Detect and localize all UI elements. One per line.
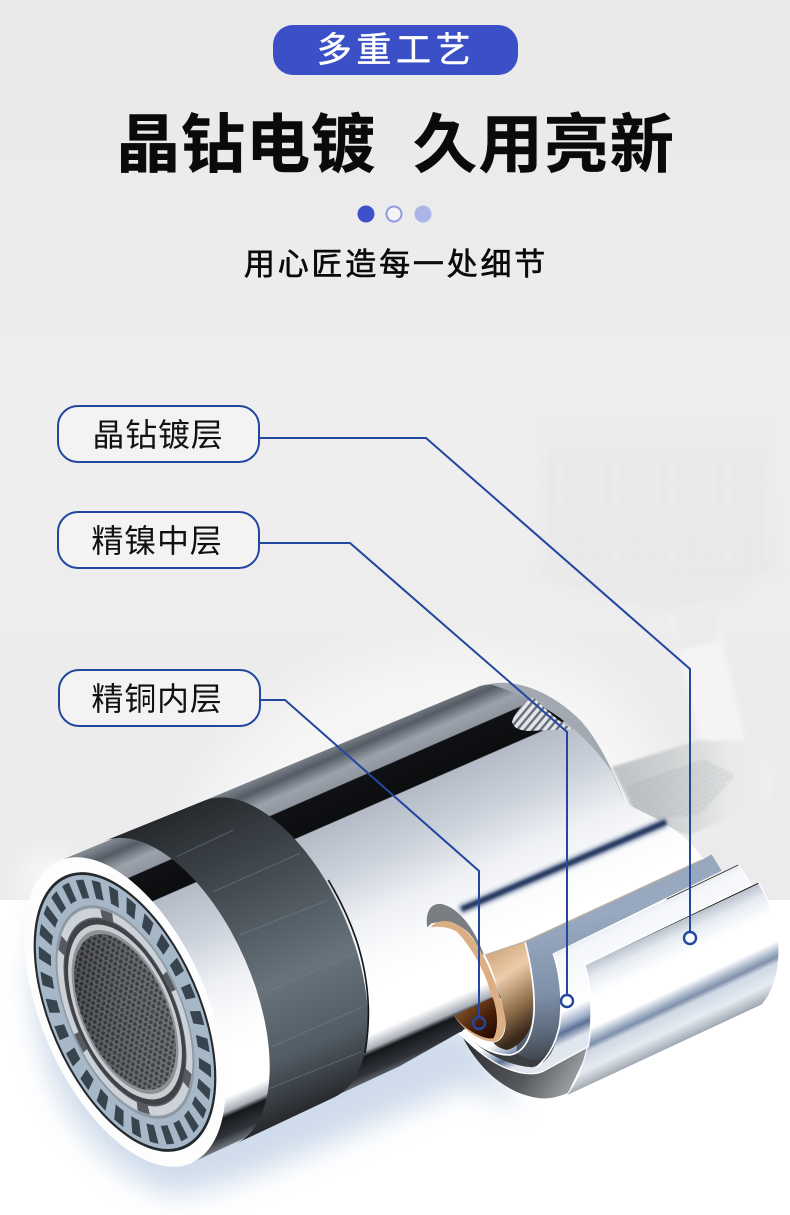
chrome cylinder	[59, 684, 704, 1163]
toothed ring	[0, 849, 251, 1175]
aerator front face	[0, 828, 267, 1196]
leader: nickel layer	[259, 543, 573, 1007]
copper white outline	[463, 942, 534, 1055]
title: 久用亮新	[413, 109, 675, 181]
white edge of blue layer	[537, 953, 561, 1067]
label: crystal diamond layer: 晶钻镀层	[92, 417, 224, 453]
title: 晶钻电镀	[116, 109, 376, 181]
leader: copper layer	[260, 700, 485, 1029]
textured highlight	[512, 698, 573, 731]
label: nickel layer: 精镍中层	[91, 523, 223, 559]
gray ring edge	[427, 904, 484, 955]
label: copper layer	[59, 670, 260, 726]
copper crescent	[431, 921, 505, 1042]
nickel layer top edge	[667, 865, 738, 899]
dark inner rim	[0, 845, 254, 1179]
category pill	[273, 25, 518, 75]
sleeve reflection halo	[460, 822, 666, 910]
title	[116, 109, 675, 181]
label: nickel layer	[58, 512, 259, 568]
sleeve reflection band	[462, 822, 666, 909]
pagination dots	[358, 206, 432, 222]
nickel layer	[460, 865, 752, 1074]
label: copper layer: 精铜内层	[91, 681, 223, 717]
leader: crystal diamond layer	[259, 438, 696, 944]
dark gap crescent	[463, 1032, 557, 1067]
label: crystal diamond layer	[58, 406, 259, 462]
aerator tap body	[59, 683, 704, 1163]
outer chrome layer	[565, 883, 779, 1097]
subtitle: 用心匠造每一处细节	[244, 247, 548, 282]
grip band edge	[328, 880, 368, 1053]
copper hole	[454, 997, 497, 1038]
white rim	[0, 828, 267, 1196]
tap shadow	[33, 900, 520, 1195]
copper layer	[485, 942, 533, 1050]
leader lines	[259, 438, 696, 1029]
copper top seam	[485, 860, 702, 955]
grip ridges	[177, 830, 363, 1088]
outer layer top edge	[586, 883, 758, 965]
dark grip band	[103, 765, 410, 1144]
cutaway layers	[427, 854, 779, 1098]
mesh screen	[53, 919, 197, 1105]
copper-side blue layer	[517, 854, 722, 1060]
cylinder back rim	[490, 683, 625, 803]
dark inner crescent	[462, 1033, 592, 1098]
category pill: 多重工艺	[317, 31, 475, 70]
faint faucet behind	[20, 417, 776, 1120]
